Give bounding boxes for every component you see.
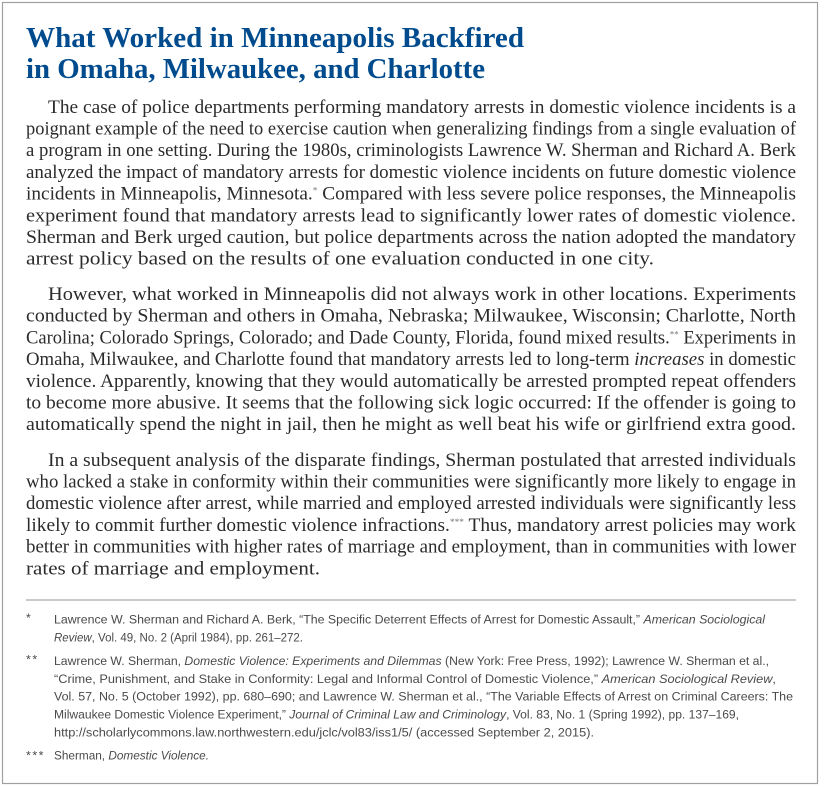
- text block: paragraph on Sherman's analysis: rates of marriage and employment.: [26, 558, 320, 579]
- text block: paragraph on mixed results elsewhere: **: [670, 329, 679, 339]
- text block: paragraph on Minneapolis experiment: Compared with less severe police responses, the Minneapolis: [317, 184, 796, 205]
- text block: paragraph on mixed results elsewhere: automatically spend the night in jail, then he might as well beat his wife or girlfriend extra good.: [26, 414, 796, 435]
- text block: paragraph on Minneapolis experiment: poignant example of the need to exercise caution when generalizing findings from a single evaluation of: [26, 118, 797, 140]
- text block: paragraph on Sherman's analysis: domestic violence after arrest, while married and employed arrested individuals were significantly less: [26, 493, 796, 514]
- footnote: double asterisk: **: [26, 652, 39, 666]
- text block: paragraph on mixed results elsewhere: to become more abusive. It seems that the following sick logic occurred: If the offender is going to: [26, 392, 796, 414]
- text block: paragraph on Minneapolis experiment: *: [313, 186, 318, 196]
- text block: paragraph on mixed results elsewhere: violence. Apparently, knowing that they would automatically be arrested prompted repeat offenders: [26, 371, 796, 392]
- text block: paragraph on mixed results elsewhere: Carolina; Colorado Springs, Colorado; and Dade County, Florida, found mixed results.: [26, 327, 672, 348]
- text block: paragraph on Minneapolis experiment: incidents in Minneapolis, Minnesota.: [26, 184, 302, 205]
- text block: paragraph on Minneapolis experiment: analyzed the impact of mandatory arrests for domestic violence incidents on future domestic violence: [26, 162, 796, 183]
- text block: paragraph on mixed results elsewhere: Omaha, Milwaukee, and Charlotte found that mandatory arrests led to long-term increases in domestic: [26, 349, 796, 370]
- text block: paragraph on mixed results elsewhere: Experiments in: [679, 327, 797, 348]
- title: [26, 22, 524, 85]
- footnote: single asterisk: Review, Vol. 49, No. 2 (April 1984), pp. 261–272.: [54, 630, 303, 644]
- text block: paragraph on Minneapolis experiment: a program in one setting. During the 1980s, criminologists Lawrence W. Sherman and Richard A. Berk: [26, 140, 797, 161]
- title: What Worked in Minneapolis Backfired: [26, 22, 524, 54]
- text block: paragraph on Sherman's analysis: [26, 450, 797, 579]
- footnote: double asterisk: “Crime, Punishment, and Stake in Conformity: Legal and Informal Control of Domestic Violence,” American Sociological Review ,: [54, 672, 776, 686]
- text block: paragraph on Minneapolis experiment: Sherman and Berk urged caution, but police departments across the nation adopted the mandatory: [26, 227, 797, 248]
- text block: paragraph on Minneapolis experiment: experiment found that mandatory arrests lead to significantly lower rates of domestic violence.: [26, 205, 796, 226]
- footnote: single asterisk: Lawrence W. Sherman and Richard A. Berk, “The Specific Deterrent Effects of Arrest for Domestic Assault,” American Sociological: [54, 612, 766, 626]
- footnote: double asterisk: Lawrence W. Sherman, Domestic Violence: Experiments and Dilemmas (New York: Free Press, 1992); Lawrence W. Sherman et al.,: [54, 654, 769, 668]
- text block: paragraph on Minneapolis experiment: The case of police departments performing mandatory arrests in domestic violence incidents is a: [48, 97, 796, 118]
- text block: paragraph on mixed results elsewhere: However, what worked in Minneapolis did not always work in other locations. Experiments: [48, 284, 796, 305]
- footnote: double asterisk: Milwaukee Domestic Violence Experiment,” Journal of Criminal Law and Criminology, Vol. 83, No. 1 (Spring 1992), pp. 137–169,: [54, 708, 739, 722]
- text block: paragraph on Sherman's analysis: In a subsequent analysis of the disparate findings, Sherman postulated that arrested individuals: [48, 450, 796, 471]
- text block: paragraph on Sherman's analysis: Thus, mandatory arrest policies may work: [464, 515, 797, 536]
- footnote: triple asterisk: ***: [26, 748, 45, 762]
- text block: paragraph on Sherman's analysis: ***: [450, 517, 465, 527]
- footnote: double asterisk: Vol. 57, No. 5 (October 1992), pp. 680–690; and Lawrence W. Sherman et al., “The Variable Effects of Arrest on Criminal Careers: The: [54, 690, 793, 704]
- footnote: double asterisk: [26, 652, 793, 740]
- text block: paragraph on Minneapolis experiment: [26, 97, 797, 270]
- footnote: single asterisk: [26, 611, 766, 644]
- text block: paragraph on mixed results elsewhere: [26, 284, 797, 435]
- footnote: single asterisk: *: [26, 611, 31, 625]
- footnote: triple asterisk: Sherman, Domestic Violence.: [54, 748, 209, 762]
- text block: paragraph on mixed results elsewhere: conducted by Sherman and others in Omaha, Nebraska; Milwaukee, Wisconsin; Charlotte, North: [26, 306, 797, 327]
- text block: paragraph on Sherman's analysis: likely to commit further domestic violence infractions.: [26, 515, 432, 536]
- text block: paragraph on Minneapolis experiment: arrest policy based on the results of one evaluation conducted in one city.: [26, 249, 654, 270]
- footnote: double asterisk: http://scholarlycommons.law.northwestern.edu/jclc/vol83/iss1/5/ (accessed September 2, 2015).: [54, 726, 594, 740]
- text block: paragraph on Sherman's analysis: better in communities with higher rates of marriage and employment, than in communities with lower: [26, 537, 797, 558]
- title: in Omaha, Milwaukee, and Charlotte: [26, 53, 485, 85]
- text block: paragraph on Sherman's analysis: who lacked a stake in conformity within their communities were significantly more likely to engage in: [26, 472, 797, 492]
